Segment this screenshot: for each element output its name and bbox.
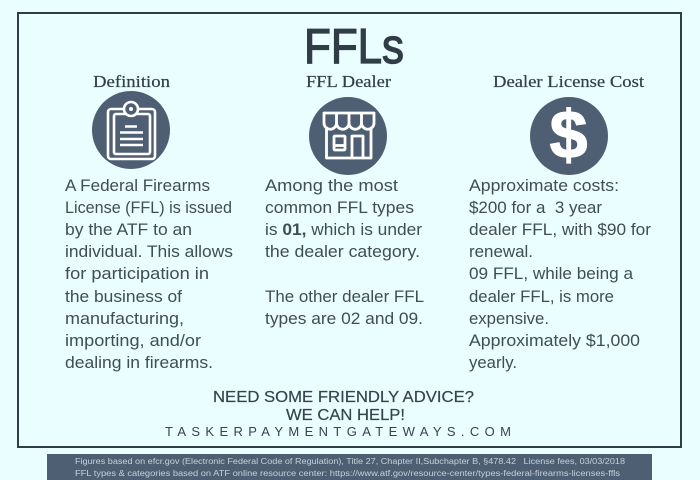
text: FFL dealer: the dealer category. xyxy=(265,243,420,261)
text: FFL dealer: types are 02 and 09. xyxy=(265,310,423,328)
footer: sources: FFL types & categories based on ATF online resource center: https://www.atf.gov/resource-center/types-federal-firearms-licenses-ffls xyxy=(75,468,620,478)
text: dealer license cost: 09 FFL, while being a xyxy=(469,265,634,283)
text: definition: dealing in firearms. xyxy=(65,354,213,372)
panel: dealer license cost xyxy=(469,72,652,372)
text: dealer license cost: dealer FFL, is more xyxy=(469,288,614,306)
text: FFL dealer xyxy=(265,177,424,328)
call to action xyxy=(165,389,511,439)
text: dealer license cost: Approximate costs: xyxy=(469,177,619,195)
text: dealer license cost: yearly. xyxy=(469,354,517,372)
title: FFLs xyxy=(304,20,404,74)
text: dealer license cost: $200 for a 3 year xyxy=(469,199,603,217)
heading: dealer license cost: Dealer License Cost xyxy=(493,72,644,91)
text: dealer license cost: Approximately $1,000 xyxy=(469,332,640,350)
text: definition: by the ATF to an xyxy=(65,221,192,239)
icon: clipboard xyxy=(92,91,170,169)
text: dealer license cost: renewal. xyxy=(469,243,533,261)
text: definition: A Federal Firearms xyxy=(65,177,210,195)
footer: sources xyxy=(47,454,652,480)
heading: FFL dealer: FFL Dealer xyxy=(306,72,391,91)
call to action: NEED SOME FRIENDLY ADVICE? xyxy=(213,389,474,406)
panel: FFL dealer xyxy=(265,72,424,328)
text: definition: importing, and/or xyxy=(65,332,202,350)
icon: dollar sign xyxy=(530,97,608,175)
panel: definition xyxy=(65,72,233,372)
icon: storefront xyxy=(309,97,387,175)
text: FFL dealer: Among the most xyxy=(265,177,398,195)
text: definition xyxy=(65,177,233,372)
text: FFL dealer: common FFL types xyxy=(265,199,414,217)
text: FFL dealer: The other dealer FFL xyxy=(265,288,424,306)
text: definition: manufacturing, xyxy=(65,310,184,328)
text: definition: the business of xyxy=(65,288,182,306)
text: FFL dealer: is 01, which is under xyxy=(265,221,423,239)
footer: sources: Figures based on efcr.gov (Electronic Federal Code of Regulation), Title 27, Chapter II,Subchapter B, §478.42 License fees, 03/03/2018 xyxy=(75,456,625,466)
text: definition: individual. This allows xyxy=(65,243,233,261)
heading: definition: Definition xyxy=(93,72,171,91)
text: dealer license cost xyxy=(469,177,652,372)
call to action: WE CAN HELP! xyxy=(286,407,405,424)
text: definition: for participation in xyxy=(65,265,209,283)
call to action: TASKERPAYMENTGATEWAYS.COM xyxy=(165,424,511,439)
icon: dollar sign: $ xyxy=(550,97,587,173)
text: definition: License (FFL) is issued xyxy=(65,199,232,217)
text: dealer license cost: expensive. xyxy=(469,310,549,328)
text: dealer license cost: dealer FFL, with $90 for xyxy=(469,221,652,239)
